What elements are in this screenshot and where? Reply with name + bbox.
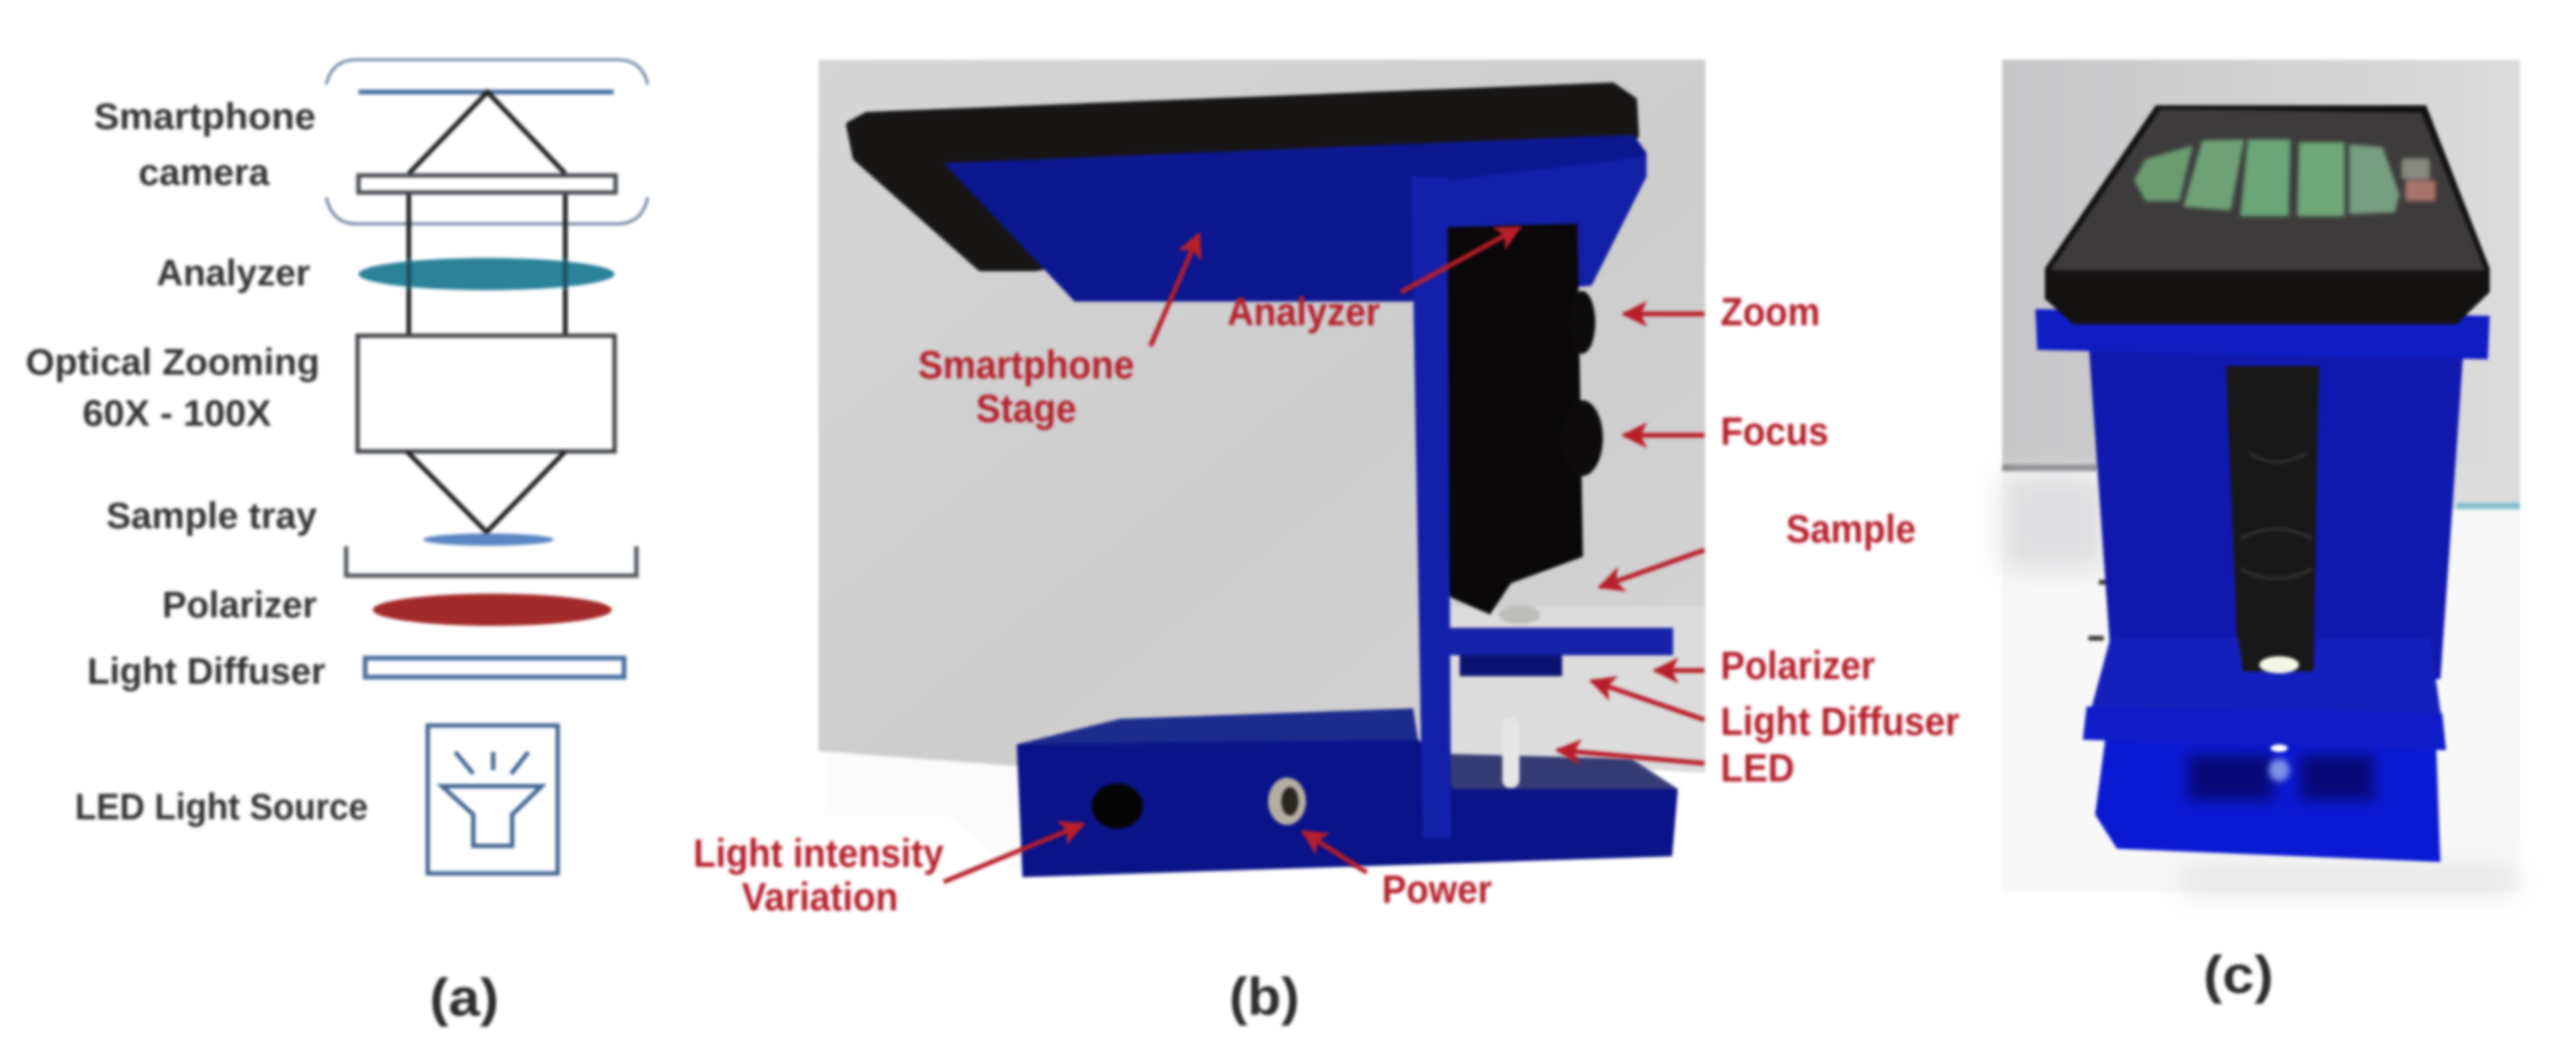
schematic labels: camera xyxy=(138,153,269,193)
panel c: front photo of device xyxy=(2002,60,2520,1004)
annotation labels: Variation xyxy=(742,874,898,919)
annotation labels: Power xyxy=(1382,867,1492,911)
annotation labels: Focus xyxy=(1720,409,1829,453)
panel a: optical schematic xyxy=(26,60,648,1027)
schematic labels: Optical Zooming xyxy=(26,342,320,383)
smartphone side xyxy=(850,86,1635,267)
schematic labels: 60X - 100X xyxy=(83,394,271,434)
annotation labels: Light Diffuser xyxy=(1720,699,1960,743)
base shadow right xyxy=(2300,755,2374,800)
intensity knob xyxy=(1092,783,1143,829)
icon: LED light source xyxy=(428,725,558,873)
annotation labels: LED xyxy=(1720,745,1794,790)
focus knob xyxy=(1561,400,1603,476)
annotation labels: Zoom xyxy=(1720,289,1820,334)
rays over analyzer xyxy=(409,258,565,290)
light diffuser xyxy=(365,658,624,677)
device body xyxy=(850,86,1678,877)
LED xyxy=(1502,718,1519,788)
sample spot xyxy=(2259,656,2299,673)
camera lens xyxy=(359,175,616,193)
annotation labels: Polarizer xyxy=(1720,643,1875,688)
platform front edge xyxy=(2083,706,2446,750)
optical zoom box xyxy=(358,336,615,451)
lower light rays xyxy=(407,451,565,532)
schematic labels: Sample tray xyxy=(106,496,317,537)
annotation labels: Smartphone xyxy=(918,342,1134,387)
pins xyxy=(2088,582,2110,638)
lens housing xyxy=(2226,366,2319,671)
caption (a): (a) xyxy=(430,967,499,1027)
base shadows xyxy=(2188,755,2273,800)
bracket: smartphone camera top xyxy=(326,60,648,84)
schematic labels: Smartphone xyxy=(94,97,316,138)
smartphone edge xyxy=(2045,105,2490,324)
base front xyxy=(1017,740,1678,877)
device body xyxy=(2088,341,2464,679)
panel b: side photo of device xyxy=(693,60,1960,1026)
annotation labels xyxy=(693,289,1960,919)
schematic labels: Polarizer xyxy=(162,585,317,626)
annotation labels: Analyzer xyxy=(1227,289,1380,334)
power switch xyxy=(1268,778,1306,825)
analyzer ellipse xyxy=(359,258,615,290)
schematic labels xyxy=(26,97,368,828)
screen image: leaf xyxy=(2134,139,2436,216)
smartphone screen xyxy=(2051,109,2485,270)
device front xyxy=(2035,105,2490,862)
polarizer block xyxy=(1460,655,1562,676)
camera sensor line xyxy=(359,89,614,95)
sample platform xyxy=(1447,628,1673,655)
LED glow xyxy=(2269,744,2290,781)
smartphone stage xyxy=(944,135,1647,302)
schematic labels: Light Diffuser xyxy=(87,651,325,692)
base top surface xyxy=(1017,708,1419,746)
upper light rays xyxy=(409,92,565,336)
lens housing xyxy=(1439,224,1583,615)
annotation labels: Light intensity xyxy=(693,831,945,875)
zoom knob xyxy=(1569,291,1595,354)
base top right surface xyxy=(1447,754,1678,789)
annotation labels: Sample xyxy=(1786,506,1916,551)
photo background xyxy=(2002,60,2520,892)
annotation arrows xyxy=(944,228,1704,882)
schematic labels: Analyzer xyxy=(156,253,310,294)
vertical post xyxy=(1411,176,1451,838)
polarizer ellipse xyxy=(373,594,612,626)
stage right section xyxy=(1447,156,1647,302)
sample ellipse xyxy=(423,533,554,546)
schematic labels: LED Light Source xyxy=(75,787,368,828)
photo background xyxy=(819,60,1705,877)
smartphone stage xyxy=(2035,309,2490,359)
sample platform xyxy=(2083,638,2446,750)
sample xyxy=(1499,605,1540,624)
caption (b): (b) xyxy=(1229,966,1299,1026)
caption (c): (c) xyxy=(2203,945,2273,1004)
bracket: smartphone camera bottom xyxy=(326,197,648,224)
annotation labels: Stage xyxy=(976,386,1076,431)
lower base xyxy=(2095,730,2440,862)
sample tray xyxy=(346,546,636,576)
lens rings xyxy=(2240,453,2312,578)
